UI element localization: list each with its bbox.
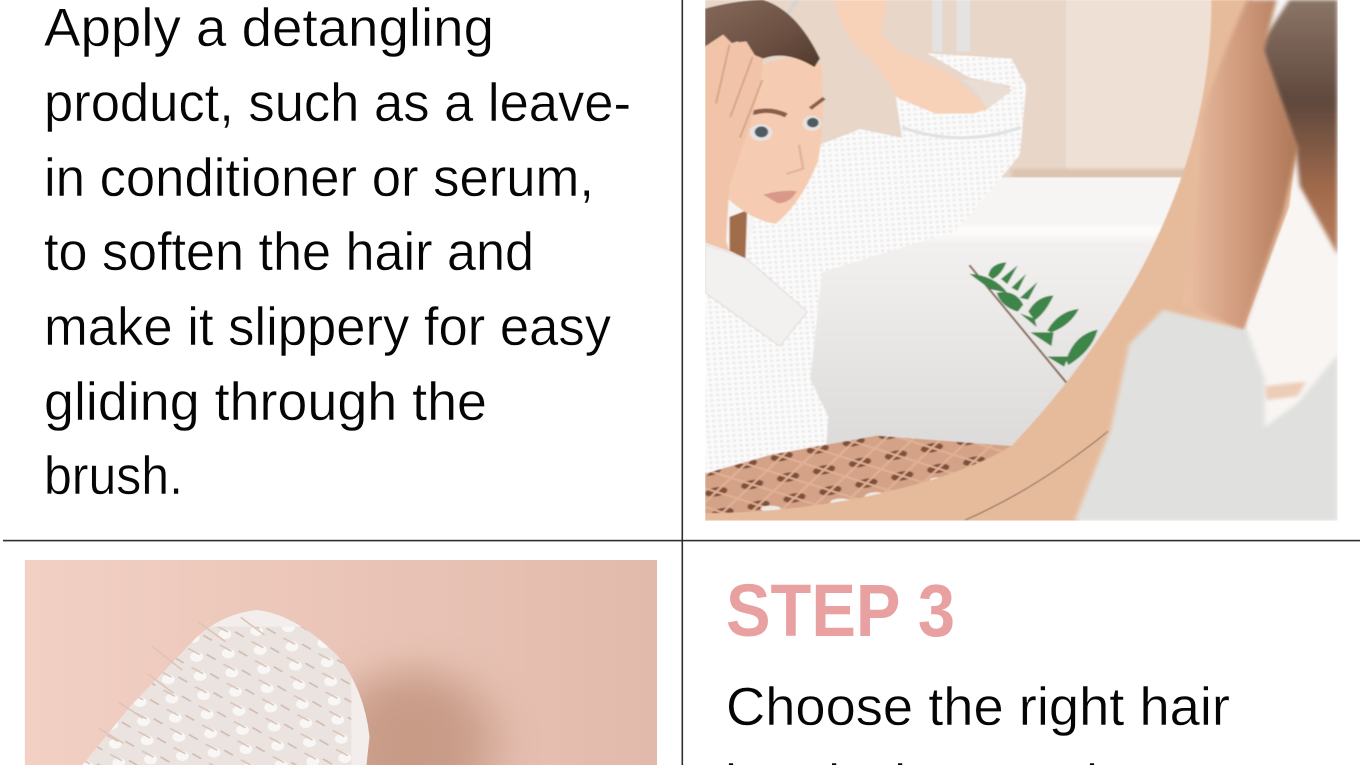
sub: brush bristles <box>82 627 351 765</box>
sub: brush shadow <box>330 670 494 765</box>
sub: hand on forehead <box>705 34 763 251</box>
text block: step 3 instructions <box>725 677 1230 765</box>
heading: step 3: STEP 3 <box>726 569 955 652</box>
sub: sleeve cuff fold <box>902 127 1021 138</box>
sub: white gaps in the chair <box>761 477 946 512</box>
sub: hair <box>705 0 820 67</box>
text block: step 2 instructions: brush. <box>44 446 183 506</box>
text block: step 3 instructions: Choose the right hair <box>726 677 1230 737</box>
sub: face <box>725 58 823 224</box>
sub: robe collar <box>705 245 807 346</box>
divider: horizontal rule <box>3 540 1360 541</box>
sub: mirror edge line <box>965 431 1108 520</box>
sub: foreground robe <box>1075 310 1338 521</box>
sub: robe <box>705 53 1026 474</box>
text block: step 2 instructions: in conditioner or serum, <box>44 148 594 208</box>
photo: woman checking her hair in a round mirror <box>705 0 1338 521</box>
sub: plant <box>969 262 1098 393</box>
sub: brush body <box>82 610 370 765</box>
sub: finger separations <box>716 45 762 138</box>
sub: sleeve cuff interior <box>964 80 1012 107</box>
text block: step 2 instructions <box>44 0 631 506</box>
photo: white detangling brush on pink background <box>25 560 657 765</box>
sub: woven cane chair <box>705 436 1011 521</box>
text block: step 2 instructions: to soften the hair and <box>44 222 534 282</box>
text block: step 2 instructions: product, such as a leave- <box>44 73 631 133</box>
sub: neck <box>729 210 747 258</box>
sub: floor strip <box>1264 382 1306 400</box>
sub: eyes, brows, nose and lips <box>750 98 824 203</box>
sub: foreground hair and neck <box>1260 0 1338 255</box>
sub: protruding bristle tips <box>99 617 265 743</box>
sub: raised arm and top hand <box>835 0 988 114</box>
sub: round mirror frame <box>705 0 1298 521</box>
sub: foreground arm and hand <box>1202 0 1299 330</box>
text block: step 2 instructions: make it slippery for easy <box>44 297 611 357</box>
divider: vertical rule <box>682 0 683 765</box>
text block: step 2 instructions: gliding through the <box>44 372 487 432</box>
